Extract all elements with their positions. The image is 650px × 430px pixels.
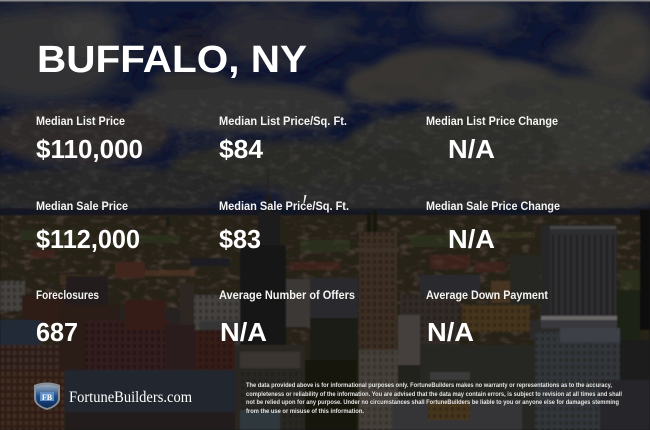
stat: median list price: $110,000 <box>36 134 143 164</box>
antenna tick <box>304 195 306 203</box>
stat: average number of offers: N/A <box>220 317 267 347</box>
stat: average down payment: N/A <box>427 317 474 347</box>
stat: median list price change: N/A <box>448 134 495 164</box>
stat: median sale price per sq ft: $83 <box>219 224 261 254</box>
stat: average number of offers: Average Number of Offers <box>219 290 355 302</box>
stat: average number of offers <box>219 290 355 347</box>
stat: foreclosures: 687 <box>36 317 78 347</box>
disclaimer text: from the use or misuse of this information. <box>246 408 364 415</box>
central brick tower <box>355 210 399 430</box>
stat: median sale price: $112,000 <box>36 224 140 254</box>
stat: median list price change: Median List Price Change <box>426 116 558 128</box>
stat: median sale price change <box>426 201 560 254</box>
disclaimer text: The data provided above is for informational purposes only. FortuneBuilders makes no warranty or representations as to the accuracy, <box>246 382 612 389</box>
stat: foreclosures: Foreclosures <box>36 290 99 302</box>
title: BUFFALO, NY <box>37 39 307 81</box>
icon: shield: FB <box>42 393 53 402</box>
logo: FortuneBuilders <box>34 382 192 410</box>
stat: median list price per sq ft: $84 <box>219 134 264 164</box>
foreground buildings <box>0 300 650 430</box>
stat: median list price <box>36 116 143 164</box>
stat: median list price per sq ft <box>219 116 347 164</box>
mid-ground buildings <box>0 255 640 371</box>
stat: median list price change <box>426 116 558 164</box>
stat: median sale price change: N/A <box>448 224 495 254</box>
stat: foreclosures <box>36 290 99 347</box>
far right black tower <box>640 210 650 330</box>
icon: shield <box>34 382 60 410</box>
stat: median sale price per sq ft: Median Sale Price/Sq. Ft. <box>219 201 349 213</box>
stat: median sale price change: Median Sale Price Change <box>426 201 560 213</box>
stat: median sale price per sq ft <box>219 201 349 254</box>
right dark office tower <box>541 225 617 328</box>
top edge line <box>0 0 650 2</box>
stat: median list price per sq ft: Median List Price/Sq. Ft. <box>219 116 347 128</box>
stat: median sale price: Median Sale Price <box>36 201 128 213</box>
sky and clouds <box>0 0 650 216</box>
stat: average down payment: Average Down Payment <box>426 290 548 302</box>
dark tower with spire <box>240 170 286 355</box>
stat: median sale price <box>36 201 140 254</box>
wordmark: FortuneBuilders.com <box>69 389 192 406</box>
stat: average down payment <box>426 290 548 347</box>
stat: median list price: Median List Price <box>36 116 125 128</box>
distant city <box>0 215 650 430</box>
disclaimer text <box>246 382 622 415</box>
